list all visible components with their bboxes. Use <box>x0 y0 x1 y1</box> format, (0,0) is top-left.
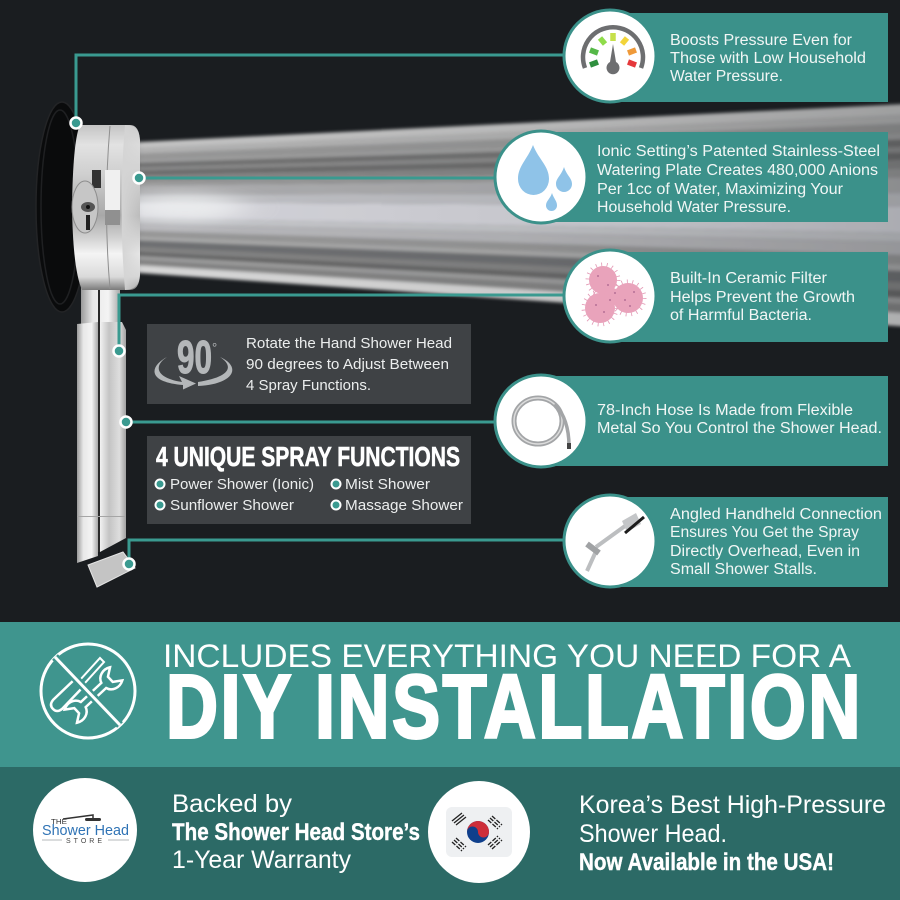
panel: pressure <box>564 10 888 102</box>
warranty text: Backed by <box>172 790 292 818</box>
panel: spray functions <box>147 436 471 524</box>
selector button <box>72 181 98 233</box>
handle left tube <box>77 322 98 563</box>
icon: 90 degree rotation: 90 <box>177 331 212 383</box>
connector: angled handle <box>124 540 566 570</box>
panel text: Metal So You Control the Shower Head. <box>597 420 882 437</box>
icon: pressure gauge <box>583 27 643 74</box>
panel text: Built-In Ceramic Filter <box>670 270 827 287</box>
list item: sunflower shower: Sunflower Shower <box>170 498 294 514</box>
heading: 4 UNIQUE SPRAY FUNCTIONS <box>156 441 460 472</box>
banner subheading: INCLUDES EVERYTHING YOU NEED FOR A <box>163 638 852 674</box>
badge: Korean flag <box>428 781 530 883</box>
panel: ionic plate <box>495 131 888 223</box>
badge: store logo: STORE <box>66 838 104 845</box>
badge: store logo: Shower Head <box>42 822 129 839</box>
switch slot <box>92 170 120 225</box>
panel text: Those with Low Household <box>670 50 866 67</box>
connector: ceramic filter <box>114 295 566 356</box>
panel text: Per 1cc of Water, Maximizing Your <box>597 181 843 198</box>
handle neck <box>81 285 120 327</box>
icon: bacteria <box>584 265 644 324</box>
angled nozzle <box>88 552 135 587</box>
rotate text: 4 Spray Functions. <box>246 378 371 394</box>
icon: no tools <box>41 644 135 738</box>
panel text <box>670 32 866 85</box>
icon: water drops <box>518 145 572 211</box>
panel text: Angled Handheld Connection <box>670 506 882 523</box>
list item: power shower: Power Shower (Ionic) <box>170 477 314 493</box>
panel text: Directly Overhead, Even in <box>670 543 860 560</box>
handle right tube <box>100 322 126 552</box>
rotate text: 90 degrees to Adjust Between <box>246 357 449 373</box>
Korea text: Korea’s Best High-Pressure <box>579 791 886 819</box>
warranty text <box>172 790 420 874</box>
shower head product photo <box>36 102 140 587</box>
panel: rotate 90 degrees <box>147 324 471 404</box>
panel text: Household Water Pressure. <box>597 199 791 216</box>
black back plate <box>36 102 88 312</box>
panel text: 78-Inch Hose Is Made from Flexible <box>597 402 853 419</box>
Korea text <box>579 791 886 876</box>
banner heading: DIY INSTALLATION <box>166 657 860 757</box>
list item: mist shower: Mist Shower <box>345 477 430 493</box>
warranty text: The Shower Head Store’s <box>172 819 420 846</box>
list item: massage shower: Massage Shower <box>345 498 463 514</box>
panel text: Boosts Pressure Even for <box>670 32 852 49</box>
translucent front lens <box>122 125 140 290</box>
water spray <box>130 103 900 328</box>
connector: pressure <box>70 55 566 128</box>
panel text: Water Pressure. <box>670 68 783 85</box>
panel: hose <box>495 375 888 467</box>
panel text <box>597 143 880 216</box>
badge: store logo <box>33 778 137 882</box>
rotate text: Rotate the Hand Shower Head <box>246 336 452 352</box>
rotate text <box>246 336 452 394</box>
chrome head body <box>72 125 140 290</box>
panel: ceramic filter <box>564 250 888 342</box>
panel text: Ionic Setting’s Patented Stainless-Steel <box>597 143 880 160</box>
footer band <box>0 767 900 900</box>
connector: hose <box>120 416 500 428</box>
panel text <box>670 506 882 578</box>
panel: angled connection <box>564 495 888 587</box>
icon: 90 degree rotation <box>154 331 232 390</box>
panel text <box>670 270 855 324</box>
panel text: of Harmful Bacteria. <box>670 307 812 324</box>
Korea text: Shower Head. <box>579 820 727 848</box>
panel text <box>597 402 882 437</box>
icon: angled handheld <box>587 513 644 571</box>
panel text: Watering Plate Creates 480,000 Anions <box>597 162 878 179</box>
panel text: Small Shower Stalls. <box>670 561 817 578</box>
banner: DIY installation <box>0 622 900 767</box>
Korea text: Now Available in the USA! <box>579 849 834 876</box>
panel text: Helps Prevent the Growth <box>670 289 855 306</box>
icon: hose <box>514 398 571 449</box>
spray highlight <box>125 193 245 221</box>
badge: store logo: THE <box>51 819 67 826</box>
icon: 90 degree rotation: ° <box>212 340 217 355</box>
panel text: Ensures You Get the Spray <box>670 524 859 541</box>
connector: watering plate <box>134 172 500 184</box>
warranty text: 1-Year Warranty <box>172 846 351 874</box>
